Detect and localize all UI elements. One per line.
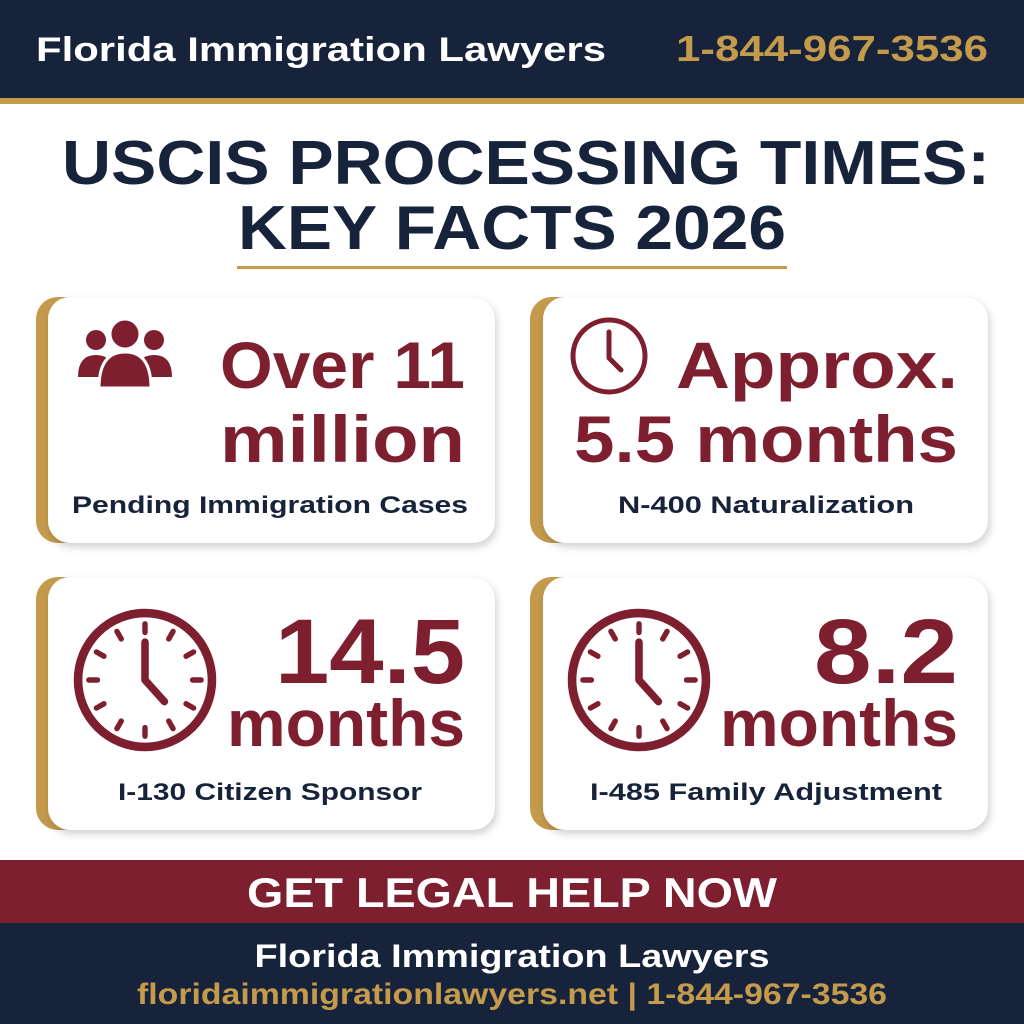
header phone: 1-844-967-3536	[676, 28, 988, 69]
panel: I-130: 14.5	[275, 601, 465, 703]
panel: I-130: months	[227, 686, 465, 760]
title: USCIS PROCESSING TIMES:	[62, 129, 990, 198]
icon: clock	[572, 613, 706, 747]
header bar	[0, 0, 1024, 104]
icon: small clock	[573, 320, 645, 392]
footer: Florida Immigration Lawyers	[254, 938, 770, 974]
panel: N-400: 5.5 months	[574, 402, 958, 476]
title: KEY FACTS 2026	[238, 194, 786, 263]
panel: pending cases	[36, 297, 495, 543]
icon: clock	[78, 613, 212, 747]
call to action band	[0, 860, 1024, 923]
panel: I-485	[530, 577, 988, 830]
stat: Over 11	[220, 328, 465, 402]
panel: I-485: I-485 Family Adjustment	[590, 779, 942, 806]
panel: N-400	[530, 297, 988, 543]
footer	[0, 923, 1024, 1024]
panel: N-400: N-400 Naturalization	[618, 492, 914, 519]
icon: people	[78, 319, 172, 388]
footer: floridaimmigrationlawyers.net | 1-844-967-3536	[137, 978, 887, 1011]
label: Pending Immigration Cases	[72, 492, 468, 519]
panel: I-130: I-130 Citizen Sponsor	[118, 779, 422, 806]
title	[62, 129, 990, 269]
panel: N-400: Approx.	[676, 328, 958, 402]
panel: I-130	[36, 577, 495, 830]
panel: pending cases: million	[220, 402, 465, 476]
header firm name: Florida Immigration Lawyers	[36, 31, 606, 69]
panel: I-485: 8.2	[814, 601, 958, 703]
call to action band: GET LEGAL HELP NOW	[247, 869, 777, 916]
panel: I-485: months	[720, 686, 958, 760]
